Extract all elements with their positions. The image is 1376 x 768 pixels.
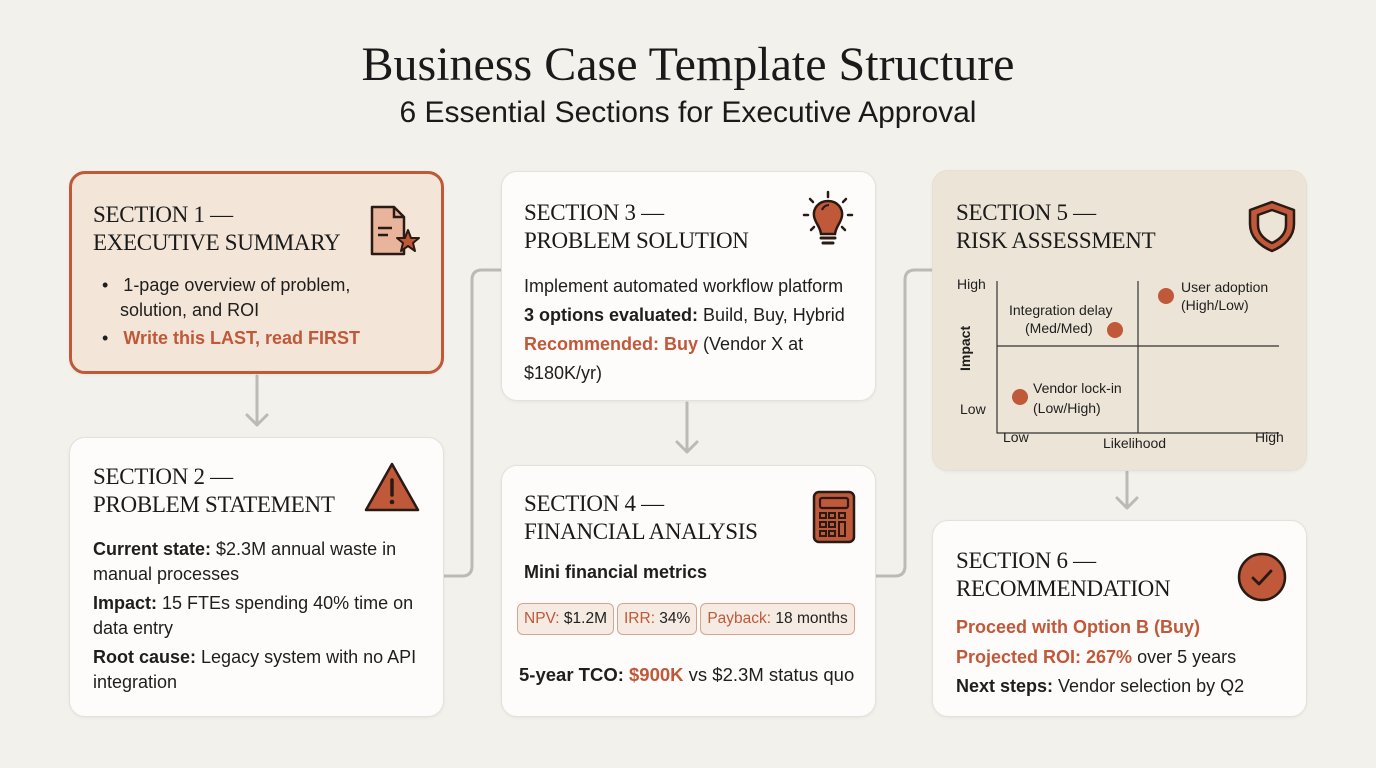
icon: check circle (1238, 552, 1286, 602)
heading: PROBLEM STATEMENT (93, 492, 335, 517)
risk matrix: Integration delay (1009, 302, 1113, 318)
panel: section 6 (932, 520, 1307, 717)
body: Implement automated workflow platform (524, 276, 843, 296)
risk matrix (957, 276, 1284, 451)
panel: section 2 (69, 437, 444, 717)
panel: section 4 (501, 465, 876, 717)
body: 3 options evaluated: Build, Buy, Hybrid (524, 305, 845, 325)
heading: FINANCIAL ANALYSIS (524, 519, 758, 544)
bullets: • Write this LAST, read FIRST (102, 328, 360, 348)
risk matrix: Impact (957, 326, 973, 371)
metric pills: NPV: $1.2M (524, 610, 607, 627)
icon: lightbulb (802, 190, 854, 244)
risk matrix: Vendor lock-in (1033, 380, 1122, 396)
body: Next steps: Vendor selection by Q2 (956, 676, 1244, 696)
subtitle: 6 Essential Sections for Executive Approval (400, 96, 976, 129)
heading (93, 202, 340, 255)
risk matrix: Low (1003, 429, 1030, 445)
title: Business Case Template Structure (362, 38, 1014, 91)
risk matrix: Low (960, 401, 987, 417)
icon: calculator (812, 490, 856, 544)
body (93, 539, 416, 692)
body: Projected ROI: 267% over 5 years (956, 646, 1236, 666)
heading: SECTION 5 — (956, 200, 1096, 225)
panel: section 1 (69, 171, 444, 374)
icon: warning (364, 462, 420, 512)
panel: section 3 (501, 171, 876, 401)
heading: SECTION 4 — (524, 491, 664, 516)
body (524, 276, 845, 383)
metric pills: IRR: 34% (624, 610, 690, 627)
heading (524, 200, 749, 253)
body: Recommended: Buy (Vendor X at $180K/yr) (524, 334, 803, 383)
risk matrix: Likelihood (1103, 435, 1166, 451)
risk matrix: High (1255, 429, 1284, 445)
body: Current state: $2.3M annual waste in manual processes (93, 539, 396, 584)
body: Impact: 15 FTEs spending 40% time on data entry (93, 593, 413, 638)
heading: SECTION 1 — (93, 202, 233, 227)
bullets: • 1-page overview of problem, solution, and ROI (102, 275, 350, 320)
bullets (102, 275, 360, 348)
body (956, 617, 1244, 696)
heading (956, 548, 1170, 601)
heading: EXECUTIVE SUMMARY (93, 230, 340, 255)
body: Proceed with Option B (Buy) (956, 617, 1200, 637)
TCO: 5-year TCO: $900K vs $2.3M status quo (519, 664, 854, 685)
risk matrix: User adoption (1181, 279, 1268, 295)
heading: SECTION 6 — (956, 548, 1096, 573)
body: Root cause: Legacy system with no API integration (93, 647, 416, 692)
subheading: Mini financial metrics (524, 562, 707, 582)
panel: section 5 (932, 170, 1307, 471)
icon: shield (1248, 200, 1296, 252)
heading (93, 464, 335, 517)
heading: PROBLEM SOLUTION (524, 228, 749, 253)
metric pills (517, 603, 855, 635)
risk matrix: (High/Low) (1181, 297, 1249, 313)
heading (956, 200, 1156, 253)
icon: document star (370, 206, 420, 256)
heading (524, 491, 758, 544)
risk matrix: (Med/Med) (1025, 320, 1093, 336)
heading: RECOMMENDATION (956, 576, 1170, 601)
risk matrix: High (957, 276, 986, 292)
heading: SECTION 2 — (93, 464, 233, 489)
metric pills: Payback: 18 months (707, 610, 848, 627)
heading: RISK ASSESSMENT (956, 228, 1155, 253)
risk matrix: (Low/High) (1033, 400, 1101, 416)
heading: SECTION 3 — (524, 200, 664, 225)
